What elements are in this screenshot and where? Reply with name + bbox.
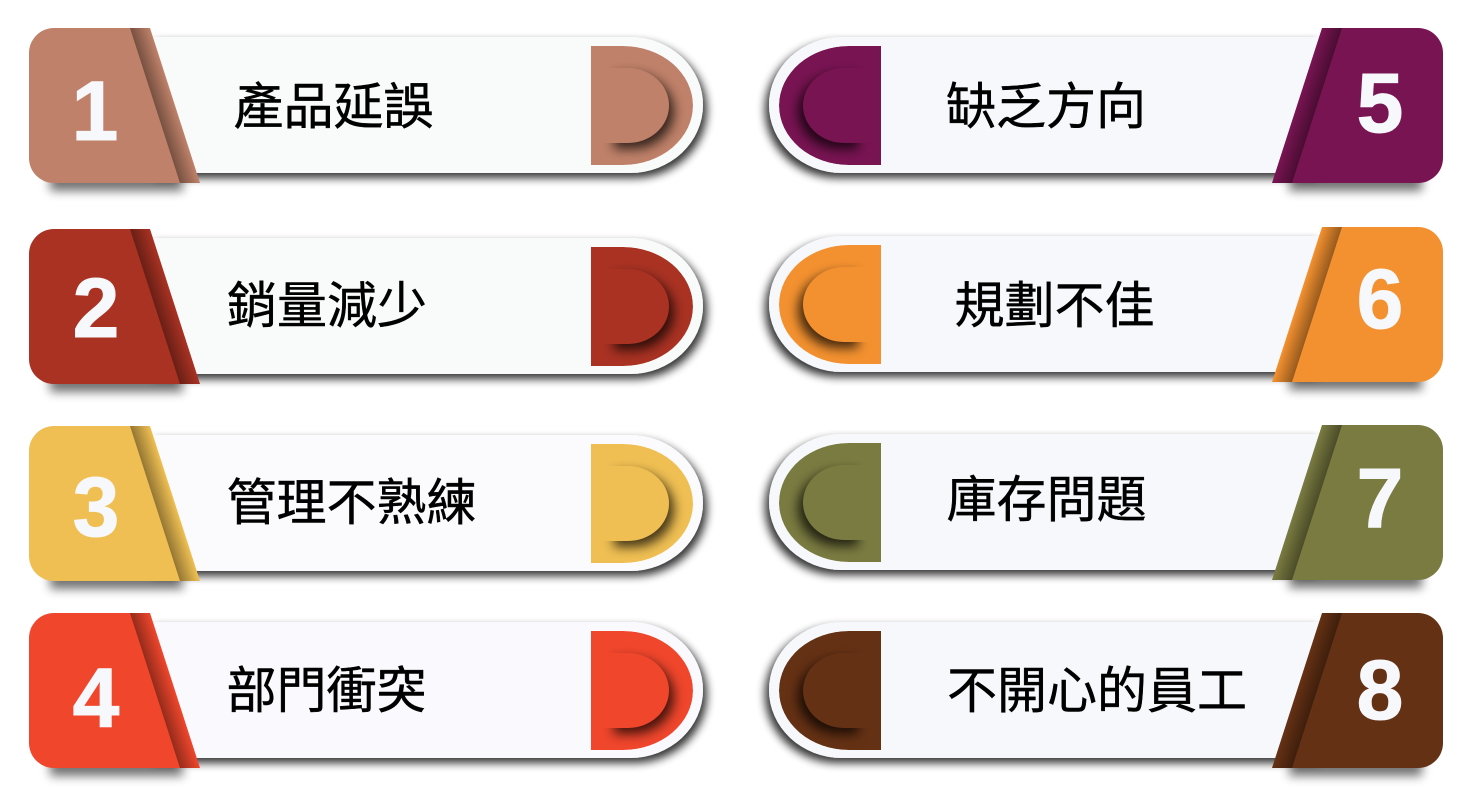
number 3: 3 [73, 460, 119, 554]
body panel 6 [769, 236, 1322, 372]
half-round badge 4 [591, 631, 693, 750]
half-round badge 7 [779, 443, 881, 562]
label 7: 庫存問題 [946, 472, 1146, 528]
number 5: 5 [1357, 56, 1403, 150]
half-round badge 1 [591, 46, 693, 165]
body panel 1 [150, 37, 703, 173]
number 4: 4 [73, 651, 120, 745]
card 5: 缺乏方向 [769, 28, 1443, 191]
card 7: 庫存問題 [769, 425, 1443, 588]
label 8: 不開心的員工 [947, 663, 1247, 719]
label 3: 管理不熟練 [226, 475, 476, 531]
number tab 1 [29, 28, 200, 191]
shapes 7 [769, 425, 1443, 588]
number 1: 1 [72, 64, 118, 158]
half-round badge 3 [591, 444, 693, 563]
half-round badge 5 [779, 46, 881, 165]
number tab 7 [1272, 425, 1443, 588]
half-round badge 2 [591, 247, 693, 366]
shapes 5 [769, 28, 1443, 191]
body panel 4 [150, 622, 703, 758]
label 6: 規劃不佳 [954, 278, 1154, 334]
card 2: 銷量減少 [29, 229, 703, 392]
half-round badge 8 [779, 631, 881, 750]
number 2: 2 [73, 261, 119, 355]
number tab 4 [29, 613, 200, 776]
number 6: 6 [1357, 252, 1403, 346]
shapes 6 [769, 227, 1443, 390]
label 1: 產品延誤 [234, 79, 434, 135]
number 7: 7 [1357, 451, 1403, 545]
number tab 6 [1272, 227, 1443, 390]
body panel 8 [769, 622, 1322, 758]
shapes 8 [769, 613, 1443, 776]
number tab 3 [29, 426, 200, 589]
label 4: 部門衝突 [226, 663, 426, 719]
card 4: 部門衝突 [29, 613, 703, 776]
body panel 7 [769, 434, 1322, 570]
number tab 8 [1272, 613, 1443, 776]
body panel 3 [150, 435, 703, 571]
label 2: 銷量減少 [227, 278, 427, 334]
body panel 2 [150, 238, 703, 374]
number tab 2 [29, 229, 200, 392]
label 5: 缺乏方向 [946, 79, 1146, 135]
card 6: 規劃不佳 [769, 227, 1443, 390]
number tab 5 [1272, 28, 1443, 191]
half-round badge 6 [779, 245, 881, 364]
body panel 5 [769, 37, 1322, 173]
number 8: 8 [1357, 643, 1403, 737]
card 1: 產品延誤 [29, 28, 703, 191]
card 8: 不開心的員工 [769, 613, 1443, 776]
card 3: 管理不熟練 [29, 426, 703, 589]
